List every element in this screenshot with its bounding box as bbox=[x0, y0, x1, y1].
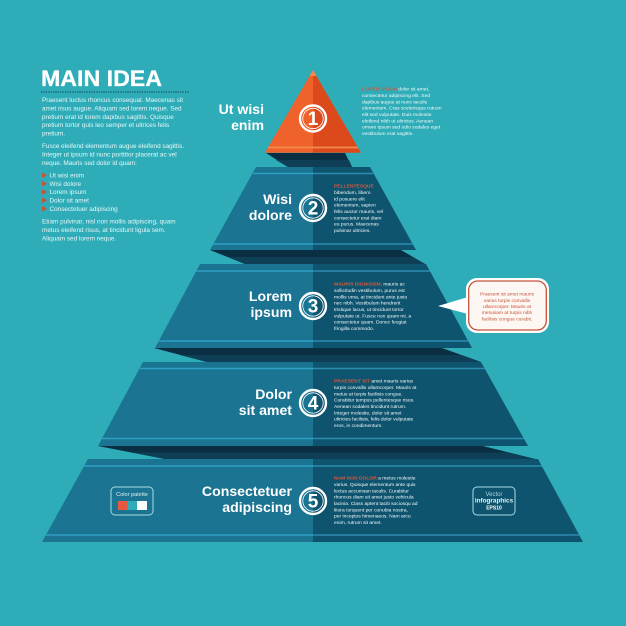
intro text block: pretium. bbox=[42, 130, 65, 138]
callout: varius turpis convallis bbox=[484, 298, 531, 304]
text block 4 bbox=[334, 379, 417, 429]
shadow between tiers 3 and 4 bbox=[154, 348, 481, 362]
text block 5: litora torquent per conubia nostra, bbox=[334, 507, 408, 513]
text block 2 bbox=[334, 184, 383, 234]
text block 2: bibendum, libero bbox=[334, 190, 371, 196]
vector infographics box bbox=[473, 487, 515, 515]
text block 2: eu purus. Maecenas bbox=[334, 222, 379, 228]
badge 2: 2 bbox=[308, 199, 318, 220]
shadow between tiers 4 and 5 bbox=[98, 446, 535, 459]
text block 1: elit sed vulputate. Duis molestie bbox=[362, 112, 432, 118]
text block 3: sollicitudin vestibulum, purus est bbox=[334, 288, 405, 294]
callout: metusiam at turpis nibh bbox=[482, 310, 533, 316]
text block 1: dapibus augue at nunc iaculis bbox=[362, 99, 428, 105]
text block 3: consectetur quam. Donec feugiat bbox=[334, 320, 407, 326]
text block 4: ultricies facilisis, felis dolor vulputate bbox=[334, 417, 414, 423]
text block 4: turpis convallis ullamcorper. Mauris at bbox=[334, 385, 417, 391]
color palette box bbox=[111, 487, 153, 515]
label: Ut wisi enim: enim bbox=[231, 117, 264, 133]
badge 3: 3 bbox=[308, 297, 318, 318]
text block 3: fringilla commodo. bbox=[334, 326, 374, 332]
intro text block bbox=[42, 97, 184, 167]
tier 4 bbox=[98, 362, 528, 446]
vector infographics box: Vector bbox=[485, 492, 503, 498]
bullet list: Consectetuer adipiscing bbox=[50, 206, 118, 213]
badge 5 bbox=[300, 488, 326, 514]
label: Dolor sit amet bbox=[239, 386, 293, 418]
text block 5: rhoncus diam sit amet justo vehicula bbox=[334, 495, 414, 501]
intro text block: Integer ut ipsum id nunc porttitor placerat ac vel bbox=[42, 152, 177, 158]
text block 2: id posuere elit bbox=[334, 196, 365, 202]
text block 5: per inceptos himenaeos. Nam arcu bbox=[334, 514, 411, 520]
text block 1: LOREM IPSUM dolor sit amet, bbox=[362, 87, 429, 93]
text block 1: ornare ipsum sed odio sodales eget bbox=[362, 125, 441, 131]
label: Wisi dolore: Wisi bbox=[263, 191, 292, 207]
label: Consectetuer adipiscing bbox=[202, 483, 293, 515]
text block 5: varius. Quisque elementum ante quis bbox=[334, 482, 416, 488]
badge 4 bbox=[300, 390, 326, 416]
text block 2: pulvinar ultricies. bbox=[334, 228, 371, 234]
callout: ullamcorper. Mauris at bbox=[483, 304, 532, 310]
text block 4: Aenean sodales tincidunt rutrum. bbox=[334, 404, 406, 410]
badge 3 bbox=[300, 293, 326, 319]
bullet list: Lorem ipsum bbox=[50, 189, 86, 196]
bullet list bbox=[42, 172, 118, 213]
text block 1: eleifend nibh ut ultricies. Aenean bbox=[362, 118, 433, 124]
label: Dolor sit amet: Dolor bbox=[255, 386, 293, 402]
closing text block: Etiam pulvinar, nisl non mollis adipiscing, quam bbox=[42, 218, 176, 226]
intro text block: neque. Mauris sed dolor id quam: bbox=[42, 160, 137, 167]
label: Wisi dolore bbox=[249, 191, 292, 223]
label: Ut wisi enim bbox=[219, 101, 264, 133]
badge 2 bbox=[300, 195, 326, 221]
bullet list: Dolor sit amet bbox=[50, 198, 89, 204]
bullet list: Ut wisi enim bbox=[50, 172, 84, 180]
text block 1: consectetur adipiscing elit. Sed bbox=[362, 93, 430, 99]
text block 4: Curabitur tempus pellentesque risus. bbox=[334, 398, 414, 404]
label: Wisi dolore: dolore bbox=[249, 207, 292, 223]
vector infographics box: infographics bbox=[475, 497, 514, 504]
text block 5 bbox=[334, 476, 418, 526]
closing text block bbox=[42, 218, 176, 242]
tier 1: orange triangle bbox=[265, 70, 361, 153]
bullet list: Wisi dolore bbox=[50, 181, 82, 188]
badge 4: 4 bbox=[308, 394, 319, 415]
text block 5: enim, rutrum sit amet. bbox=[334, 520, 382, 526]
text block 3: nec nibh. Vestibulum hendrerit bbox=[334, 301, 401, 307]
title: MAIN IDEA bbox=[41, 66, 162, 91]
text block 5: lacinia. Class aptent taciti sociosqu ad bbox=[334, 501, 418, 507]
label: Consectetuer adipiscing: Consectetuer bbox=[202, 483, 293, 499]
text block 2: PELLENTESQUE bbox=[334, 184, 374, 190]
text block 2: consectetur erat diam bbox=[334, 215, 381, 221]
color palette box: Color palette bbox=[116, 492, 148, 498]
badge 5: 5 bbox=[308, 492, 319, 513]
callout bbox=[438, 278, 549, 333]
label: Dolor sit amet: sit amet bbox=[239, 402, 292, 418]
intro text block: Fusce eleifend elementum augue eleifend sagittis. bbox=[42, 143, 184, 150]
intro text block: pretium erat id lorem dapibus sagittis. Quisque bbox=[42, 114, 174, 121]
text block 4: metus at turpis facilisis congue. bbox=[334, 391, 403, 397]
label: Lorem ipsum: Lorem bbox=[249, 288, 292, 304]
tier 3 bbox=[155, 264, 472, 348]
text block 1: vestibulum erat sagittis. bbox=[362, 131, 414, 137]
text block 5: NAM NON DOLOR a metus molestie bbox=[334, 476, 416, 482]
tier 2 bbox=[210, 167, 416, 250]
shadow between tiers 2 and 3 bbox=[210, 250, 425, 264]
text block 3: MAURIS DIGNISSIM, mauris ac bbox=[334, 282, 405, 288]
intro text block: pretium tortor quis leo semper et ultrices felis bbox=[42, 122, 169, 129]
vector infographics box: EPS10 bbox=[486, 506, 502, 512]
label: Lorem ipsum bbox=[249, 288, 292, 320]
label: Consectetuer adipiscing: adipiscing bbox=[222, 499, 292, 515]
badge 1: 1 bbox=[308, 109, 319, 130]
intro text block: amet risus augue. Aliquam sed lorem neque. Sed bbox=[42, 106, 182, 112]
text block 3: mollis urna, at tincidunt ante justo bbox=[334, 294, 408, 300]
label: Lorem ipsum: ipsum bbox=[250, 304, 292, 320]
text block 1: elementum. Cras scelerisque rutrum bbox=[362, 106, 442, 112]
text block 4: eros, in condimentum. bbox=[334, 423, 383, 429]
intro text block: Praesent luctus rhoncus consequat. Maecenas sit bbox=[42, 97, 183, 104]
text block 2: elementum, sapien bbox=[334, 203, 376, 209]
text block 1 bbox=[362, 87, 442, 137]
text block 3: vulputate ut. Fusce non quam mi, a bbox=[334, 313, 411, 319]
callout: facilisis congue curabit. bbox=[482, 316, 532, 322]
closing text block: metus eleifend risus, at tincidunt ligula sem. bbox=[42, 227, 166, 234]
text block 5: lectus accumsan iaculis. Curabitur bbox=[334, 488, 409, 494]
callout: Praesent sit amet mauris bbox=[480, 292, 535, 298]
closing text block: Aliquam sed lorem neque. bbox=[42, 236, 116, 242]
text block 4: PRAESENT SIT amet mauris varius bbox=[334, 379, 414, 385]
text block 2: felis auctor mauris, vel bbox=[334, 209, 383, 215]
text block 3: tristique lacus, ut tincidunt tortor bbox=[334, 307, 404, 313]
shadow between tiers 1 and 2 bbox=[266, 153, 352, 167]
text block 3 bbox=[334, 282, 411, 332]
text block 4: Integer molestie, dolor sit amet bbox=[334, 410, 402, 416]
label: Ut wisi enim: Ut wisi bbox=[219, 101, 264, 117]
tier 5 bbox=[42, 459, 583, 542]
